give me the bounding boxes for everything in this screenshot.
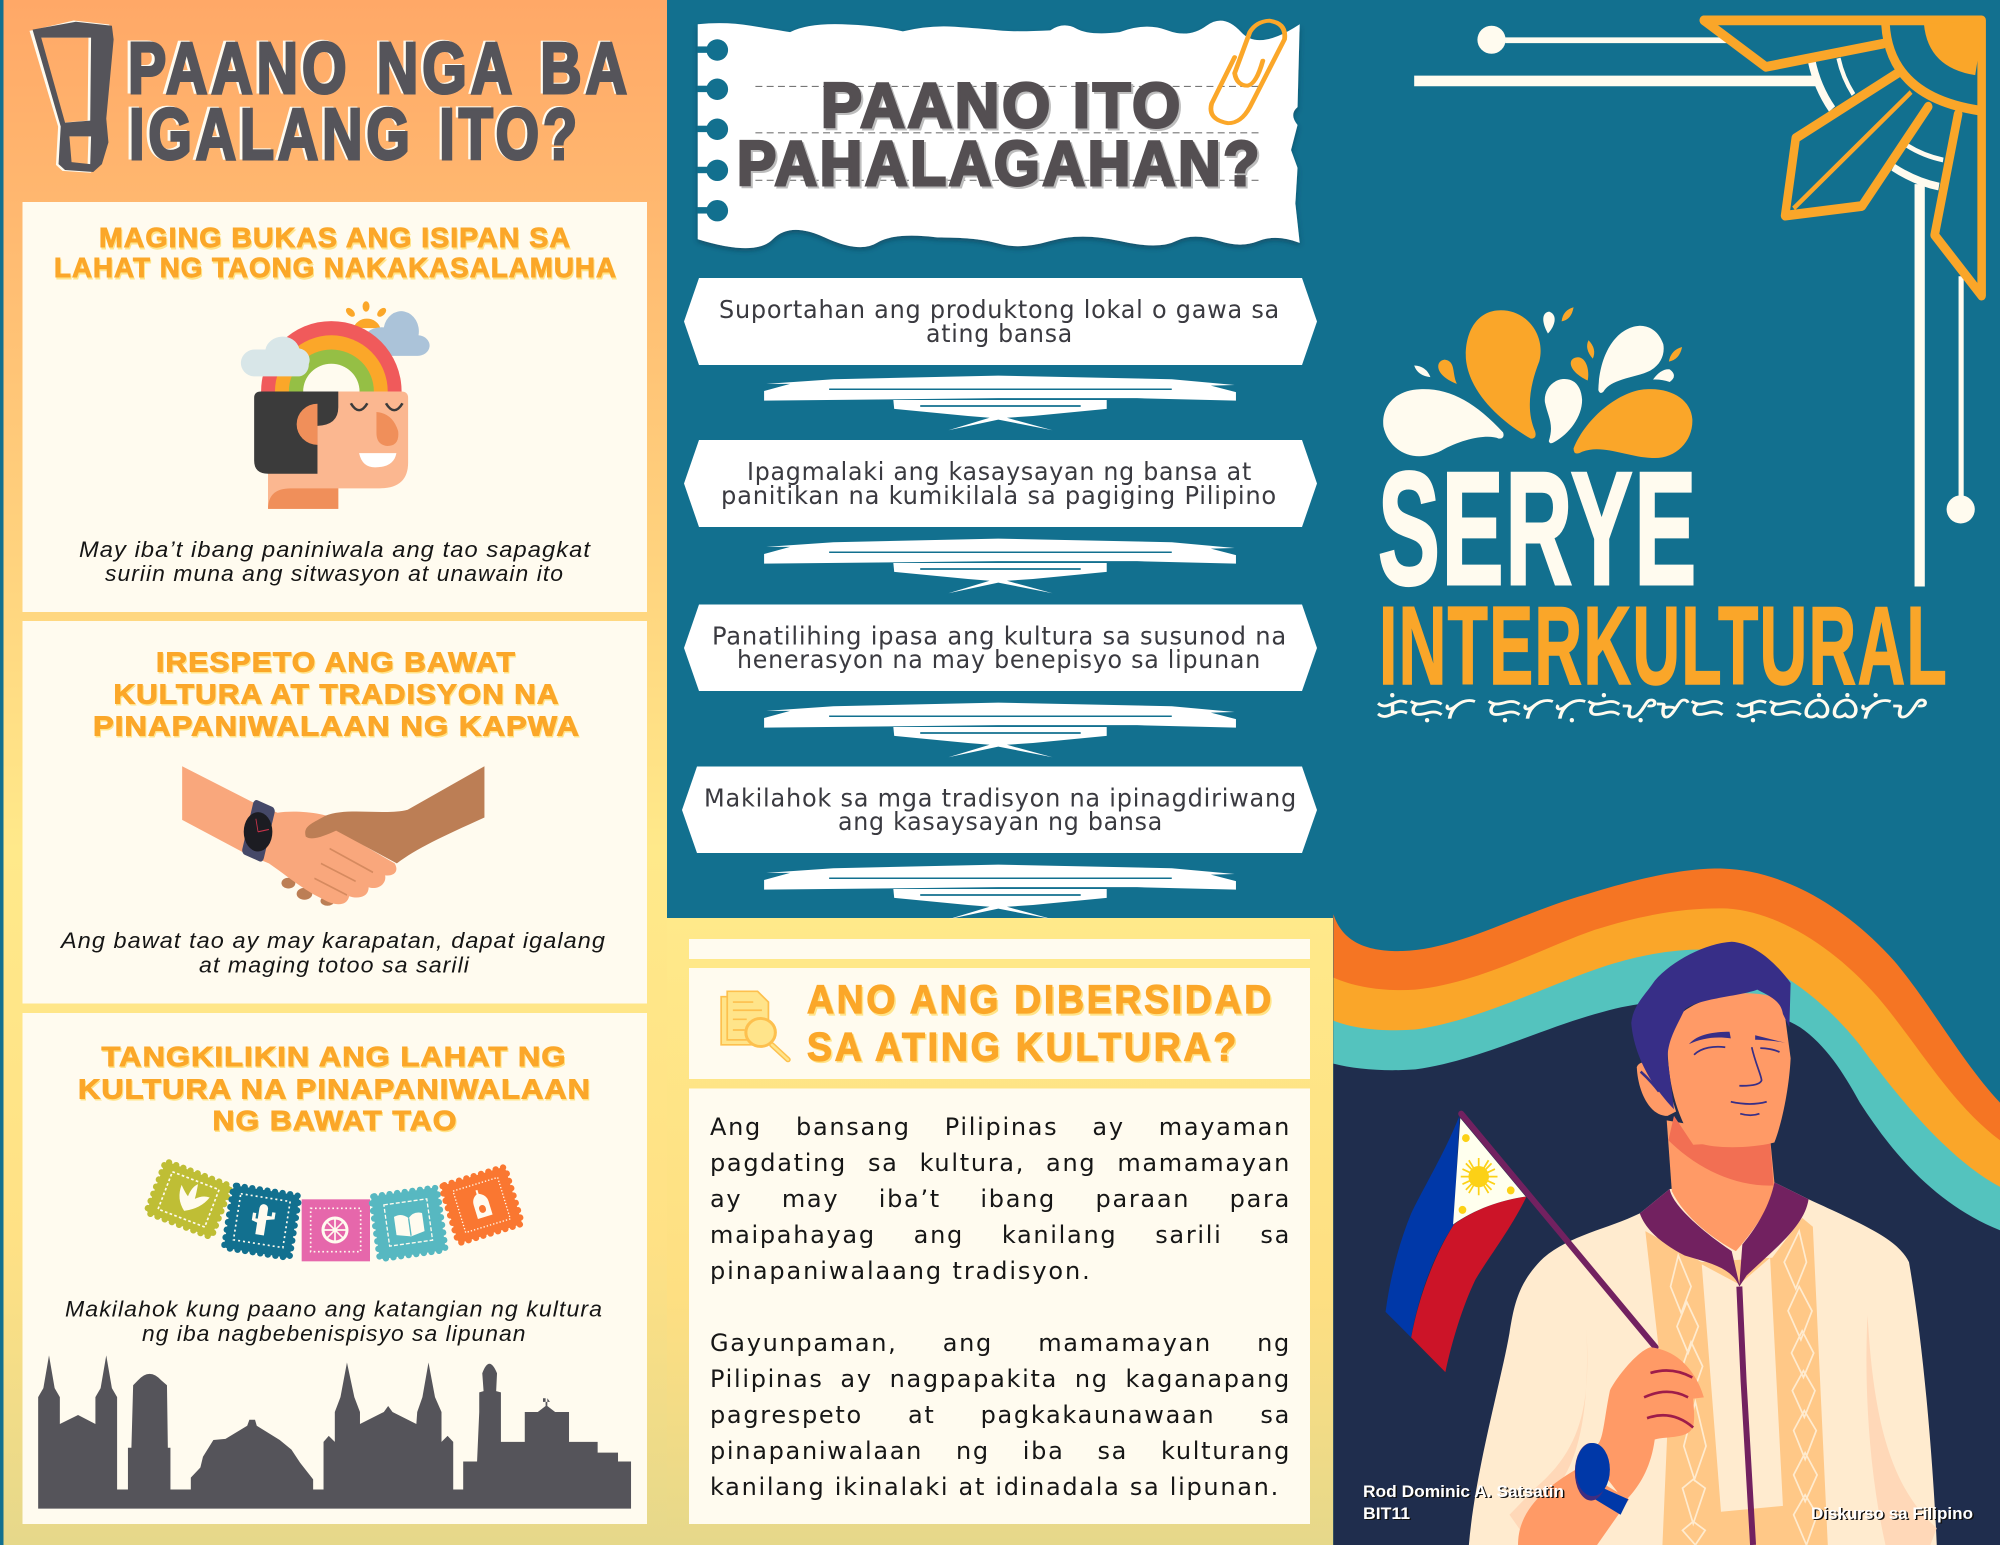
card heading: tangkilikin: NG BAWAT TAO: [212, 1105, 458, 1136]
note paper with heading: [697, 21, 1300, 248]
divider brush 2: [764, 539, 1236, 593]
text block: dibersidad body: pagrespeto at pagkakaunawaan sa: [710, 1401, 1291, 1429]
callout: pass on culture: henerasyon na may benepisyo sa lipunan: [737, 645, 1261, 674]
card heading: maging bukas: MAGING BUKAS ANG ISIPAN SA: [100, 224, 572, 255]
paper sheet: [698, 21, 1300, 248]
flag: [1386, 1116, 1527, 1372]
icon: documents with magnifier: [721, 991, 788, 1060]
caption: author: Rod Dominic A. Satsatin: [1364, 1483, 1566, 1502]
text block: dibersidad body: Gayunpaman, ang mamamayan ng: [710, 1329, 1291, 1357]
heading: paano nga ba igalang ito: IGALANG ITO?: [126, 94, 579, 174]
heading: paano nga ba igalang ito: [125, 28, 631, 175]
card text: makilahok: Makilahok kung paano ang katangian ng kultura: [65, 1296, 603, 1322]
heading: paano nga ba igalang ito: PAANO NGA BA: [128, 29, 631, 109]
divider brush 3: [764, 703, 1236, 757]
callout: pride in history: Ipagmalaki ang kasaysayan ng bansa at: [747, 457, 1252, 486]
hair: [1631, 942, 1791, 1109]
card text: makilahok: ng iba nagbebenispisyo sa lipunan: [142, 1321, 526, 1346]
caption: author: BIT11: [1363, 1504, 1410, 1523]
card text: makilahok: [65, 1296, 603, 1346]
text block: dibersidad body: Ang bansang Pilipinas ay mayaman: [710, 1113, 1291, 1141]
callout: join traditions: Makilahok sa mga tradisyon na ipinagdiriwang: [704, 784, 1297, 812]
card heading: maging bukas: LAHAT NG TAONG NAKAKASALAMUHA: [55, 254, 618, 285]
heading: paano nga ba igalang ito: PAANO NGA BA: [125, 28, 629, 108]
caption: author: Rod Dominic A. Satsatin: [1363, 1482, 1564, 1501]
collar: [1640, 1182, 1809, 1287]
heading: ano ang dibersidad: ANO ANG DIBERSIDAD: [808, 980, 1276, 1024]
embroidery diamonds: [1671, 1231, 1817, 1545]
icon: papel picado banners: [146, 1161, 522, 1261]
card heading: irespeto: KULTURA AT TRADISYON NA: [114, 680, 560, 711]
icon: head with rainbow: [241, 301, 430, 509]
card text: ang bawat tao: Ang bawat tao ay may karapatan, dapat igalang: [59, 928, 606, 953]
card heading: tangkilikin: KULTURA NA PINAPANIWALAAN: [79, 1075, 592, 1106]
card text: may iba't ibang: [79, 537, 591, 586]
illustration: man with flag: [1386, 942, 1937, 1545]
heading: ano ang dibersidad: ANO ANG DIBERSIDAD: [807, 978, 1274, 1022]
card text: ang bawat tao: at maging totoo sa sarili: [199, 952, 470, 978]
divider brush 4: [764, 865, 1236, 919]
heading: paano ito pahalagahan: [737, 71, 1264, 201]
card heading: irespeto: KULTURA AT TRADISYON NA: [114, 678, 560, 710]
neck: [1667, 1120, 1774, 1251]
card heading: tangkilikin: TANGKILIKIN ANG LAHAT NG: [102, 1041, 566, 1072]
panel: card support: [22, 1013, 647, 1524]
callout: pride in history: panitikan na kumikilala sa pagiging Pilipino: [721, 481, 1277, 510]
card text: may iba't ibang: May iba’t ibang paniniwala ang tao sapagkat: [79, 537, 591, 562]
card text: may iba't ibang: suriin muna ang sitwasyon at unawain ito: [105, 561, 564, 586]
card heading: irespeto: IRESPETO ANG BAWAT: [156, 646, 516, 678]
panel: card open mind: [22, 202, 647, 612]
icon: paperclip: [1211, 21, 1285, 123]
binder holes: [697, 39, 728, 221]
title: serye interkultural: SERYE: [1378, 439, 1698, 619]
panel: card respect: [22, 621, 647, 1004]
card heading: maging bukas: [54, 222, 618, 285]
panel: dibersidad body card: [689, 1088, 1310, 1524]
card heading: irespeto: IRESPETO ANG BAWAT: [157, 648, 517, 679]
card heading: irespeto: [93, 646, 581, 743]
card text: ang bawat tao: [59, 928, 606, 978]
illustration: rainbow waves: [1333, 869, 2000, 1545]
title: serye interkultural: [1378, 439, 1948, 708]
heading: ano ang dibersidad: SA ATING KULTURA?: [808, 1027, 1240, 1071]
text block: dibersidad body: pagdating sa kultura, ang mamamayan: [710, 1149, 1291, 1177]
caption: author: [1363, 1482, 1566, 1524]
heading: paano nga ba igalang ito: IGALANG ITO?: [129, 95, 581, 175]
callout: join traditions: ang kasaysayan ng bansa: [838, 807, 1163, 836]
text block: dibersidad body: maipahayag ang kanilang sarili sa: [710, 1221, 1291, 1249]
flag stick: [1461, 1114, 1656, 1347]
icon: paint splash: [1383, 307, 1692, 458]
text block: dibersidad body: kanilang ikinalaki at idinadala sa lipunan.: [710, 1473, 1280, 1501]
callout: pride in history: [684, 440, 1317, 527]
callout: support local products: ating bansa: [926, 319, 1073, 348]
text block: dibersidad body: pinapaniwalaang tradisyon.: [710, 1257, 1092, 1285]
callout: join traditions: [682, 766, 1317, 853]
heading: paano ito pahalagahan: PAHALAGAHAN?: [739, 131, 1264, 201]
card heading: maging bukas: MAGING BUKAS ANG ISIPAN SA: [99, 222, 571, 253]
card heading: tangkilikin: NG BAWAT TAO: [214, 1106, 458, 1138]
text block: dibersidad body: ay may iba’t ibang paraan para: [710, 1185, 1291, 1213]
text block: dibersidad body: Pilipinas ay nagpapakita ng kaganapang: [710, 1365, 1291, 1393]
caption: subject: Diskurso sa Filipino: [1812, 1505, 1974, 1524]
card heading: tangkilikin: TANGKILIKIN ANG LAHAT NG: [102, 1042, 568, 1074]
card heading: maging bukas: LAHAT NG TAONG NAKAKASALAMUHA: [54, 252, 617, 283]
ornament: sun corner and white lines: [1414, 20, 1984, 586]
card heading: tangkilikin: KULTURA NA PINAPANIWALAAN: [78, 1074, 591, 1104]
baybayin subtitle: ᜃᜒᜇᜓᜆ ᜇᜓᜆᜆᜓᜇᜒᜌᜓᜋᜇ ᜃᜓᜇᜊᜒᜊᜒᜆᜒᜌ: [1376, 691, 1927, 726]
panel: left orange column background: [4, 0, 667, 1545]
icon: handshake: [182, 766, 484, 906]
face: [1668, 993, 1791, 1147]
heading: paano ito pahalagahan: PAANO ITO: [821, 71, 1183, 141]
panel: dibersidad header card: [689, 968, 1310, 1079]
callout: pass on culture: Panatilihing ipasa ang kultura sa susunod na: [712, 622, 1287, 650]
caption: subject: Diskurso sa Filipino: [1811, 1504, 1973, 1523]
panel: middle yellow column background: [667, 918, 1333, 1545]
heading: paano ito pahalagahan: PAANO ITO: [823, 73, 1185, 143]
watch: [1595, 1488, 1628, 1515]
card heading: irespeto: PINAPANIWALAAN NG KAPWA: [94, 712, 581, 743]
text block: dibersidad body: [710, 1113, 1291, 1501]
heading: ano ang dibersidad: SA ATING KULTURA?: [807, 1026, 1239, 1070]
divider brush 1: [764, 376, 1236, 430]
caption: author: BIT11: [1364, 1505, 1412, 1524]
panel: cream strip: [689, 939, 1310, 959]
card heading: irespeto: PINAPANIWALAAN NG KAPWA: [93, 710, 580, 742]
callout: support local products: Suportahan ang produktong lokal o gawa sa: [719, 295, 1280, 324]
panel: middle teal column background: [667, 0, 1333, 918]
heading: ano ang dibersidad: [807, 978, 1276, 1071]
callout: support local products: [684, 278, 1317, 365]
panel: right cover background: [1333, 0, 2000, 1545]
hand and arm: [1518, 1468, 1629, 1545]
callout: pass on culture: [684, 604, 1317, 691]
text block: dibersidad body: pinapaniwalaan ng iba sa kulturang: [710, 1437, 1291, 1465]
heading: paano ito pahalagahan: PAHALAGAHAN?: [737, 129, 1262, 199]
card heading: tangkilikin: [78, 1041, 592, 1138]
illustration: church skyline: [38, 1355, 631, 1509]
icon: exclamation mark: [29, 21, 114, 173]
